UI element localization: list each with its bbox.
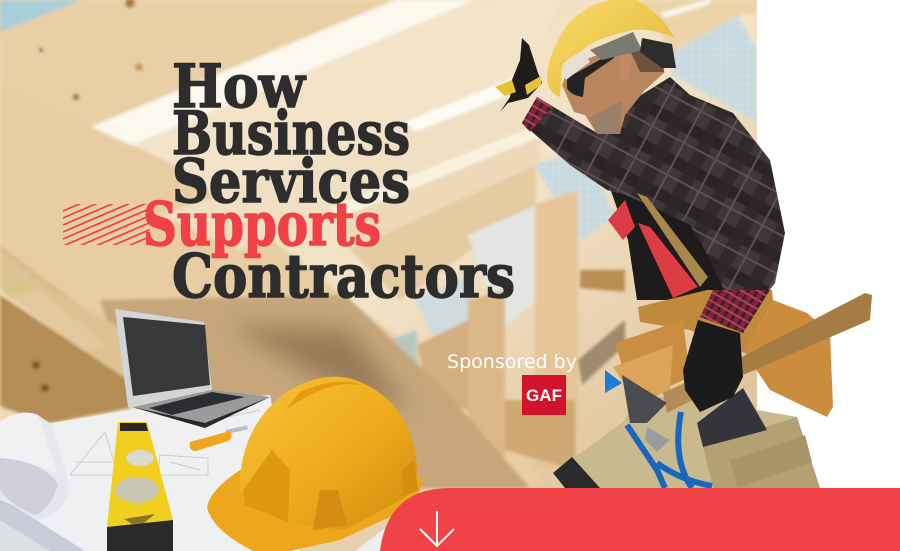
decorative red stripes behind Supports — [63, 204, 150, 245]
icon: worker trousers — [553, 388, 820, 488]
icon: blue safety straps — [605, 370, 712, 488]
icon: worker face and neck — [562, 45, 665, 134]
icon: harness with red strap — [608, 193, 708, 298]
heading line: How: How — [172, 52, 306, 122]
panel: construction worker — [495, 0, 872, 488]
icon: leather tool belt and pouches — [613, 290, 833, 417]
sponsor label: Sponsored by — [447, 351, 577, 373]
heading line: Business: Business — [172, 99, 410, 169]
icon: worker yellow hard hat — [547, 0, 676, 97]
icon: yellow hard hat on table — [207, 377, 422, 551]
icon: gloved raised hand — [495, 38, 542, 112]
icon: laptop — [115, 309, 270, 428]
icon: black gloved hand on hammer — [683, 290, 770, 412]
GAF logo — [522, 375, 566, 415]
GAF logo: GAF — [526, 386, 562, 405]
icon: rolled blueprints — [0, 413, 85, 551]
icon: worker torso under harness — [610, 188, 770, 300]
heading line: Supports: Supports — [143, 190, 381, 260]
heading line: Services: Services — [172, 147, 410, 217]
red footer band — [380, 488, 900, 551]
heading: How Business Services Supports Contractors — [63, 52, 515, 312]
heading line: Contractors: Contractors — [172, 242, 515, 312]
blueprint table — [0, 395, 300, 551]
icon: hammer with wooden handle — [622, 293, 872, 452]
icon: down arrow — [420, 511, 454, 546]
icon: screwdriver — [190, 425, 248, 451]
icon: spirit level — [107, 422, 173, 551]
icon: worker plaid shirt — [522, 77, 785, 300]
